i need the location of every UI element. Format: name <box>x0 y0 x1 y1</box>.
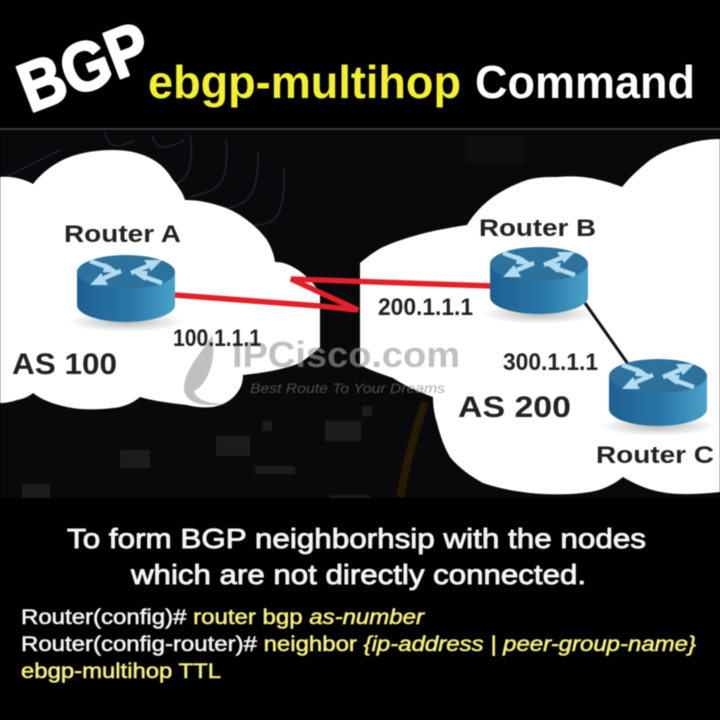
BGP tilted label: BGP <box>8 7 160 127</box>
label: 200.1.1.1: 200.1.1.1 <box>378 294 473 321</box>
label: AS 200: AS 200 <box>458 391 571 424</box>
label: 300.1.1.1: 300.1.1.1 <box>503 349 598 376</box>
description text: which are not directly connected. <box>130 559 586 590</box>
icon: Router C <box>600 359 716 436</box>
cloud: AS 200 <box>360 139 720 494</box>
icon: Router A <box>68 255 184 332</box>
label: AS 100: AS 100 <box>12 348 117 381</box>
command line 1: Router(config)# router bgp as-number <box>21 606 425 629</box>
description text: To form BGP neighborhsip with the nodes <box>67 523 646 554</box>
network labels <box>12 215 714 469</box>
command line 2: Router(config-router)# neighbor {ip-address | peer-group-name} <box>21 633 696 656</box>
watermark: Best Route To Your Dreams <box>250 380 445 396</box>
description text <box>67 523 646 590</box>
icon: Router B <box>481 247 597 324</box>
link: Router B to Router C <box>585 303 628 364</box>
white title word: Command <box>475 56 695 108</box>
link: Router A to Router B (red) <box>175 279 492 310</box>
watermark <box>184 334 460 405</box>
yellow command name: ebgp-multihop <box>148 56 461 108</box>
label: Router C: Router C <box>596 442 714 469</box>
icon: sail logo <box>184 335 228 405</box>
label: 100.1.1.1: 100.1.1.1 <box>173 325 261 352</box>
command line 3: ebgp-multihop TTL <box>21 660 221 683</box>
label: Router B: Router B <box>479 215 596 242</box>
label: Router A: Router A <box>64 221 181 248</box>
cloud: AS 100 <box>0 150 320 409</box>
watermark: IPCisco.com <box>232 334 460 375</box>
header divider <box>0 128 720 130</box>
dark server room background <box>0 130 720 498</box>
command syntax <box>21 606 696 683</box>
title <box>8 7 695 127</box>
